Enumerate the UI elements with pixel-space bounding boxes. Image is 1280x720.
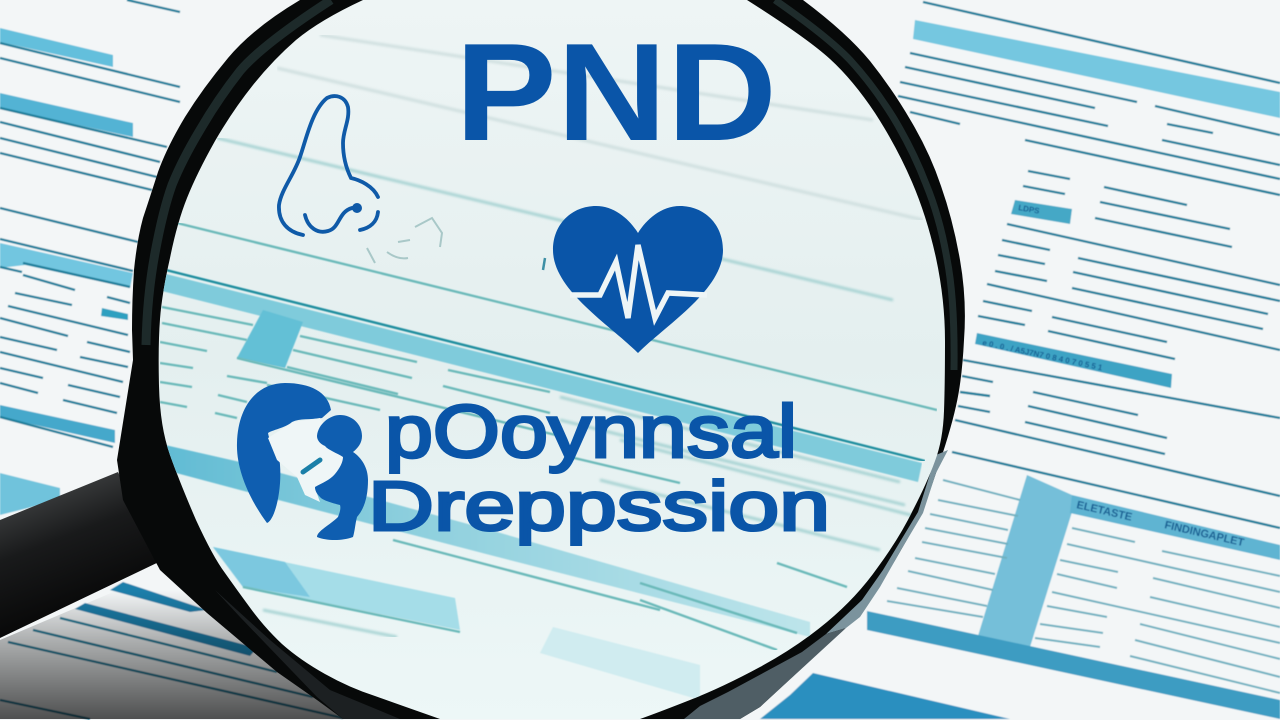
page: small table labels bbox=[982, 203, 1245, 549]
page: small table labels: ELETASTE bbox=[1075, 499, 1133, 524]
icon: nose bbox=[279, 96, 378, 235]
rim: green-grey centre highlight right bbox=[775, 0, 954, 370]
page: small table labels: FINDINGAPLET bbox=[1163, 519, 1245, 549]
rim: green-grey centre highlight left bbox=[146, 0, 331, 345]
page: small table labels: e 0 . 0 . / A5J7N7 0 8 4 0 7 0 5 5 1 bbox=[982, 338, 1104, 373]
text: garbled depression line: Dreppssion bbox=[368, 467, 830, 545]
magnifier lens bbox=[158, 0, 945, 719]
title: PND: PND bbox=[455, 15, 777, 170]
lens: faded text lines bbox=[217, 138, 930, 637]
icon: heart with pulse line bbox=[553, 206, 723, 353]
icon: mother and child silhouette bbox=[237, 383, 368, 540]
shadow of magnifier on page bbox=[0, 570, 345, 719]
page: small table labels: LDPS bbox=[1018, 203, 1041, 216]
magnifying glass handle bbox=[0, 472, 163, 638]
lens: very faded upper lines bbox=[277, 35, 923, 220]
mark beside heart bbox=[543, 258, 545, 270]
rim: lower right bevel lower section bbox=[684, 628, 846, 719]
rim: lower right bevel upper section bbox=[826, 450, 948, 634]
magnifier rim bbox=[117, 0, 965, 719]
page: table row lines bbox=[887, 480, 1280, 693]
lens: enlarged teal bands bbox=[158, 272, 922, 700]
text: garbled postnatal line: pOoynnsal bbox=[385, 390, 797, 473]
lens: enlarged strong text lines bbox=[158, 268, 925, 461]
rim: lower left bevel bbox=[215, 590, 400, 719]
faint sketch marks near nose bbox=[367, 218, 442, 263]
lens: enlarged medium text lines bbox=[160, 223, 937, 650]
